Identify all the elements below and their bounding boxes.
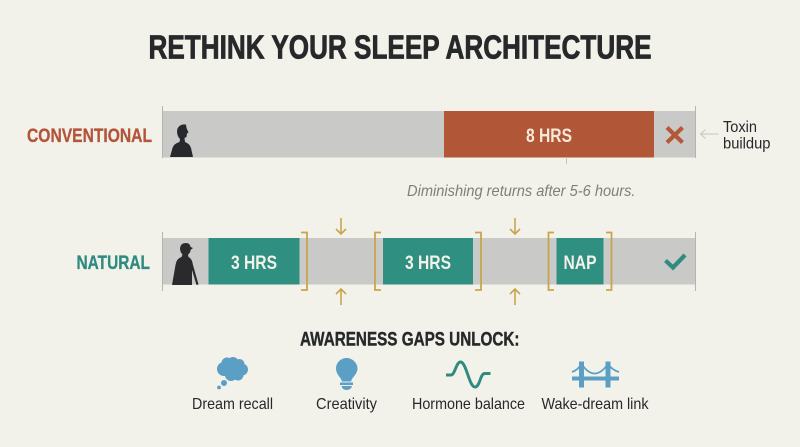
sleep block: second 3 hrs (383, 238, 473, 284)
natural track (162, 238, 696, 284)
sleep block: first 3 hrs: 3 HRS (231, 253, 277, 274)
title: RETHINK YOUR SLEEP ARCHITECTURE (148, 30, 652, 66)
text: toxin buildup: Toxin (723, 119, 757, 136)
text: toxin buildup: buildup (723, 136, 770, 152)
icon: check (666, 255, 685, 268)
sleep block: first 3 hrs (208, 238, 300, 284)
sleep block: 8 hrs (444, 111, 654, 158)
sleep block: nap: NAP (564, 253, 597, 274)
icon: wave (446, 362, 490, 387)
label: natural: NATURAL (76, 253, 150, 274)
sleep block: 8 hrs: 8 HRS (526, 126, 572, 147)
sleep block: nap (556, 238, 604, 284)
benefit: hormone balance (412, 362, 525, 413)
sleep block: second 3 hrs: 3 HRS (405, 253, 451, 274)
benefit: dream recall: Dream recall (192, 396, 273, 413)
benefit: wake-dream link (542, 362, 649, 413)
panel: conventional row (27, 106, 770, 164)
icon: cross (667, 128, 682, 142)
note: diminishing returns: Diminishing returns after 5-6 hours. (407, 183, 636, 200)
heading: awareness gaps: AWARENESS GAPS UNLOCK: (300, 328, 520, 350)
arrow: toxin pointer (700, 130, 718, 138)
icon: bridge (572, 362, 619, 388)
benefit: wake-dream link: Wake-dream link (542, 396, 649, 413)
benefit: dream recall (192, 357, 273, 413)
icon: light bulb (336, 358, 358, 390)
benefit: creativity (316, 358, 377, 413)
icon: person silhouette (170, 124, 193, 157)
gap brackets (301, 232, 612, 290)
conventional track (162, 111, 696, 158)
benefit: hormone balance: Hormone balance (412, 396, 525, 413)
benefit: creativity: Creativity (316, 396, 377, 413)
gap arrows (336, 218, 520, 305)
label: conventional: CONVENTIONAL (27, 126, 152, 147)
icon: thought cloud (217, 357, 248, 389)
icon: standing person (172, 243, 198, 285)
panel: natural row (76, 218, 696, 305)
